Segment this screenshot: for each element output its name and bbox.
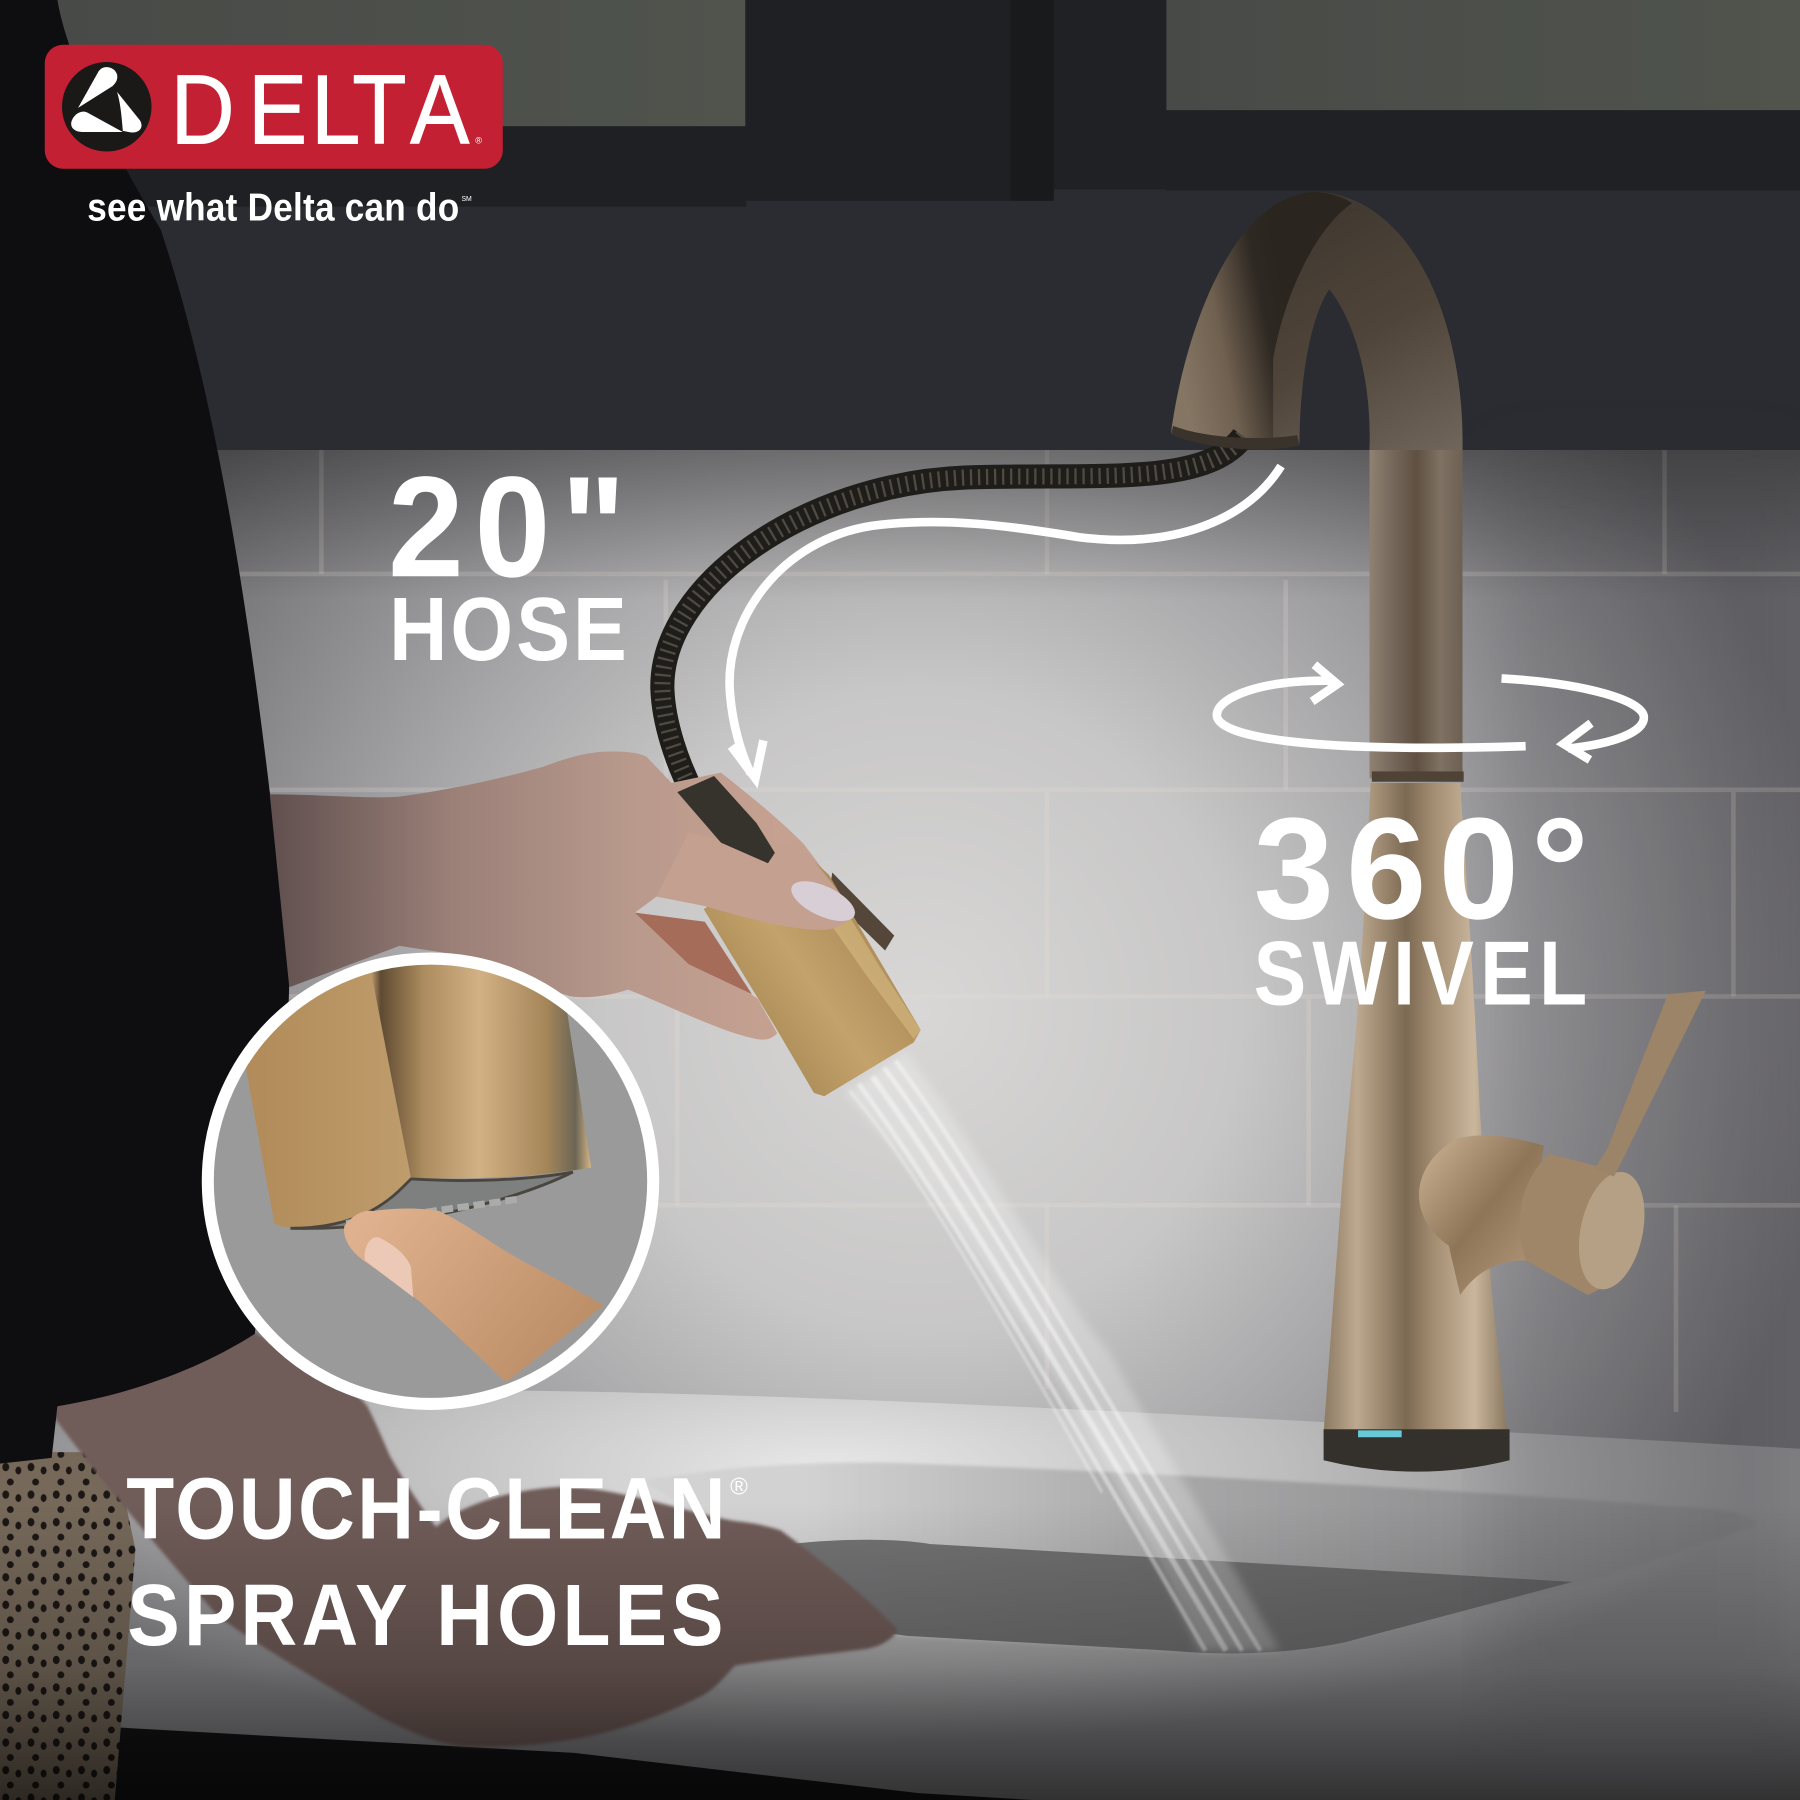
hose connector [677,776,775,863]
resting arm [46,1332,898,1747]
gooseneck arch [1171,192,1463,450]
faucet base [1324,1429,1510,1472]
logo mark [62,62,152,152]
sink basin wall [643,1462,1755,1653]
Delta logo: SM [461,196,472,203]
callout: 360 degree swivel: 360° [1254,787,1589,949]
handle cylinder [1520,1154,1642,1295]
Delta logo [45,45,503,229]
handle lever [1595,991,1706,1177]
lower shade [0,1504,1800,1800]
callout: touch-clean spray holes: ® [730,1474,748,1501]
thumb over spray head [657,832,855,930]
finger nail [365,1237,413,1297]
spray head button [829,872,894,951]
upper cabinet [0,0,1800,450]
callout: touch-clean spray holes: TOUCH-CLEAN [126,1459,726,1557]
window right [1166,0,1800,110]
hose [662,436,1243,794]
Delta logo: ® [475,135,482,145]
swivel joint [1372,771,1464,782]
spray holes [290,1172,573,1228]
leopard skirt [0,1452,135,1800]
red badge [45,45,503,169]
hose length arrow [730,466,1281,778]
base cabinet [101,1727,1033,1800]
spout lip [1171,426,1299,450]
callout: 20 inch hose [388,446,627,680]
fingernail [786,873,861,929]
window left [52,0,745,126]
gooseneck spout shade [1171,192,1352,444]
water spray [845,1052,1280,1651]
callout: touch-clean spray holes [126,1459,748,1664]
shaded fingers [635,913,752,994]
hand and wrist [270,751,855,1040]
callout: touch-clean spray holes: SPRAY HOLES [127,1566,724,1664]
wordmark: DELTA [170,54,470,165]
callout: 360 degree swivel [1254,787,1589,1025]
backsplash wall [0,436,1800,1469]
tagline: see what Delta can do [87,185,459,229]
callout: 20 inch hose: HOSE [389,580,627,680]
swivel arrows [1217,665,1644,760]
callout: 20 inch hose: 20" [388,446,626,607]
faucet [1171,192,1706,1472]
handle hub [1419,1135,1544,1295]
sink floor [792,1540,1573,1653]
inset lens: touch-clean spray holes [208,953,653,1404]
finger [344,1209,604,1382]
person: sleeve, arm, skirt [0,0,898,1800]
right vignette [1492,459,1800,1722]
spray head [704,848,921,1096]
faucet body [1324,783,1507,1433]
black sleeve [0,0,289,1464]
raised hand holding spray head [270,751,921,1096]
zoomed spray head [246,973,411,1228]
countertop [0,1390,1800,1800]
callout: 360 degree swivel: SWIVEL [1254,923,1587,1025]
faucet upper tube [1370,445,1462,778]
